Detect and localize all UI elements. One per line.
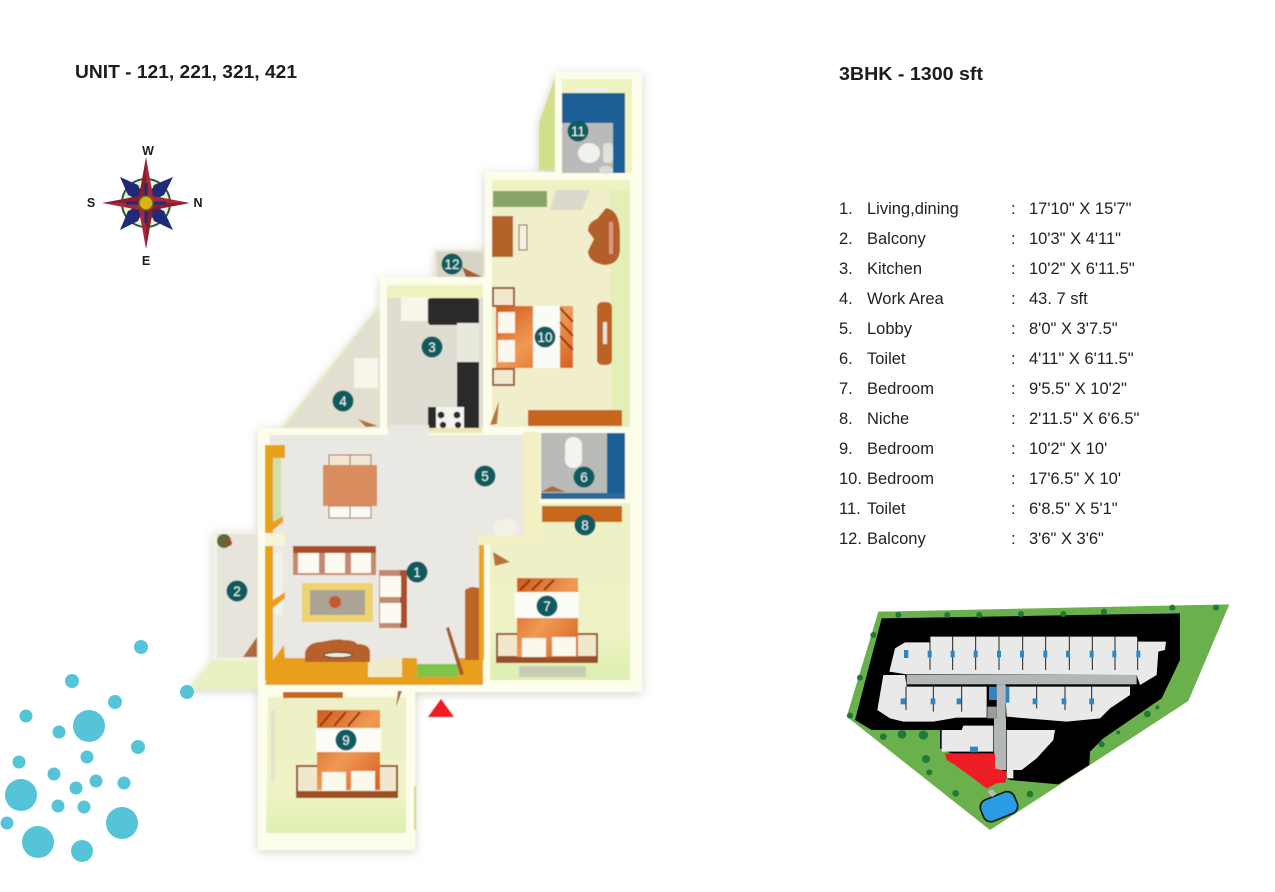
icon: compass rose <box>87 144 203 268</box>
title: unit numbers: UNIT - 121, 221, 321, 421 <box>75 61 297 82</box>
room dimensions list: 7. <box>839 380 853 398</box>
bed <box>496 306 573 368</box>
icon: compass rose: N <box>193 196 203 210</box>
room dimensions list: 6. <box>839 350 853 368</box>
room dimensions list: 3. <box>839 260 853 278</box>
room dimensions list: 5. <box>839 320 853 338</box>
room dimensions list: : <box>1011 500 1016 518</box>
room: toilet 6 <box>541 433 625 499</box>
TV console <box>597 302 612 365</box>
room dimensions list: 12. <box>839 530 862 548</box>
headboard and side tables <box>497 634 597 662</box>
room dimensions list: : <box>1011 530 1016 548</box>
room dimensions list: 10'3" X 4'11" <box>1029 230 1121 248</box>
room dimensions list: 2. <box>839 230 853 248</box>
unit divider lines <box>906 637 1138 712</box>
room dimensions list: : <box>1011 410 1016 428</box>
room dimensions list: 17'10" X 15'7" <box>1029 200 1132 218</box>
room dimensions list: Niche <box>867 410 909 428</box>
room dimensions list: 8. <box>839 410 853 428</box>
room number markers: 3 <box>428 340 436 355</box>
room dimensions list: 11. <box>839 500 861 518</box>
window <box>493 191 547 207</box>
icon: entrance triangle <box>428 699 454 717</box>
window wall strip <box>265 445 273 681</box>
room dimensions list: 4'11" X 6'11.5" <box>1029 350 1134 368</box>
room: bedroom 10 <box>490 180 630 427</box>
icon: compass rose: W <box>142 144 154 158</box>
room dimensions list: 10'2" X 6'11.5" <box>1029 260 1135 278</box>
wardrobe <box>528 410 622 426</box>
desk and chair <box>492 216 513 257</box>
heading: 3BHK size: 3BHK - 1300 sft <box>839 63 983 84</box>
room dimensions list: : <box>1011 230 1016 248</box>
room: balcony 12 <box>437 252 483 277</box>
room dimensions list: : <box>1011 260 1016 278</box>
room: kitchen <box>387 285 483 433</box>
unit blue accents <box>901 650 1140 752</box>
niche <box>542 506 622 522</box>
panel: plan walls and outline <box>188 72 642 850</box>
room: living and dining <box>265 425 540 685</box>
room number markers: 11 <box>571 124 585 139</box>
room dimensions list: Work Area <box>867 290 945 308</box>
sofa <box>588 208 620 265</box>
room dimensions list: 6'8.5" X 5'1" <box>1029 500 1118 518</box>
room dimensions list: : <box>1011 380 1016 398</box>
room dimensions list: Balcony <box>867 530 926 548</box>
site plan <box>847 604 1229 830</box>
room number markers: 10 <box>537 330 553 345</box>
room: bedroom 9 <box>266 691 416 833</box>
room dimensions list: 10'2" X 10' <box>1029 440 1107 458</box>
site driveway <box>855 613 1180 784</box>
room dimensions list: 8'0" X 3'7.5" <box>1029 320 1118 338</box>
room number markers: 9 <box>342 733 350 748</box>
cabinet and door <box>465 587 482 660</box>
site trees <box>847 605 1219 797</box>
room number markers: 1 <box>413 565 421 580</box>
room: toilet 11 <box>562 79 632 174</box>
room dimensions list: Toilet <box>867 500 906 518</box>
room dimensions list: Bedroom <box>867 380 934 398</box>
room number markers: 12 <box>444 257 460 272</box>
room number markers: 2 <box>233 584 241 599</box>
room dimensions list: Lobby <box>867 320 913 338</box>
room dimensions list: : <box>1011 440 1016 458</box>
room: balcony 2 <box>217 534 258 658</box>
room dimensions list: 3'6" X 3'6" <box>1029 530 1104 548</box>
room dimensions list: : <box>1011 200 1016 218</box>
lobby closet <box>478 432 540 545</box>
room dimensions list: 1. <box>839 200 853 218</box>
room number markers: 4 <box>339 394 347 409</box>
room number markers: 7 <box>543 599 551 614</box>
foyer floor <box>265 645 483 685</box>
room dimensions list: 9. <box>839 440 853 458</box>
bed <box>517 578 578 657</box>
room dimensions list: : <box>1011 290 1016 308</box>
site pool <box>977 788 1021 825</box>
site corridor <box>907 675 1137 770</box>
dining table with chairs <box>323 455 377 518</box>
floor plan <box>188 72 642 850</box>
side tables <box>493 288 514 306</box>
icon: compass rose: E <box>142 254 150 268</box>
room dimensions list: Toilet <box>867 350 906 368</box>
room dimensions list: 2'11.5" X 6'6.5" <box>1029 410 1140 428</box>
sofa two seater <box>379 570 407 628</box>
room dimensions list: 17'6.5" X 10' <box>1029 470 1121 488</box>
room dimensions list: 9'5.5" X 10'2" <box>1029 380 1127 398</box>
room dimensions list: Balcony <box>867 230 926 248</box>
sofa three seater <box>293 546 376 575</box>
decorative blue bubbles <box>0 640 194 862</box>
TV unit <box>305 639 370 662</box>
room dimensions list: Bedroom <box>867 470 934 488</box>
room dimensions list: Kitchen <box>867 260 922 278</box>
room number markers: 6 <box>580 470 588 485</box>
room dimensions list: 4. <box>839 290 853 308</box>
rug and coffee table <box>302 583 373 622</box>
room dimensions list: : <box>1011 470 1016 488</box>
room dimensions list: 43. 7 sft <box>1029 290 1088 308</box>
room: work area <box>286 312 378 427</box>
site highlighted unit block <box>945 753 1007 788</box>
room number markers <box>226 120 596 750</box>
room dimensions list: Living,dining <box>867 200 959 218</box>
room dimensions list <box>839 200 1140 548</box>
room: bedroom 7 <box>490 503 630 680</box>
room dimensions list: : <box>1011 350 1016 368</box>
room number markers: 5 <box>481 469 489 484</box>
room dimensions list: : <box>1011 320 1016 338</box>
room number markers: 8 <box>581 518 589 533</box>
icon: compass rose: S <box>87 196 95 210</box>
room dimensions list: Bedroom <box>867 440 934 458</box>
room dimensions list: 10. <box>839 470 862 488</box>
site building blocks <box>877 637 1166 778</box>
bedside rug <box>519 666 586 677</box>
site lawn <box>847 604 1229 830</box>
